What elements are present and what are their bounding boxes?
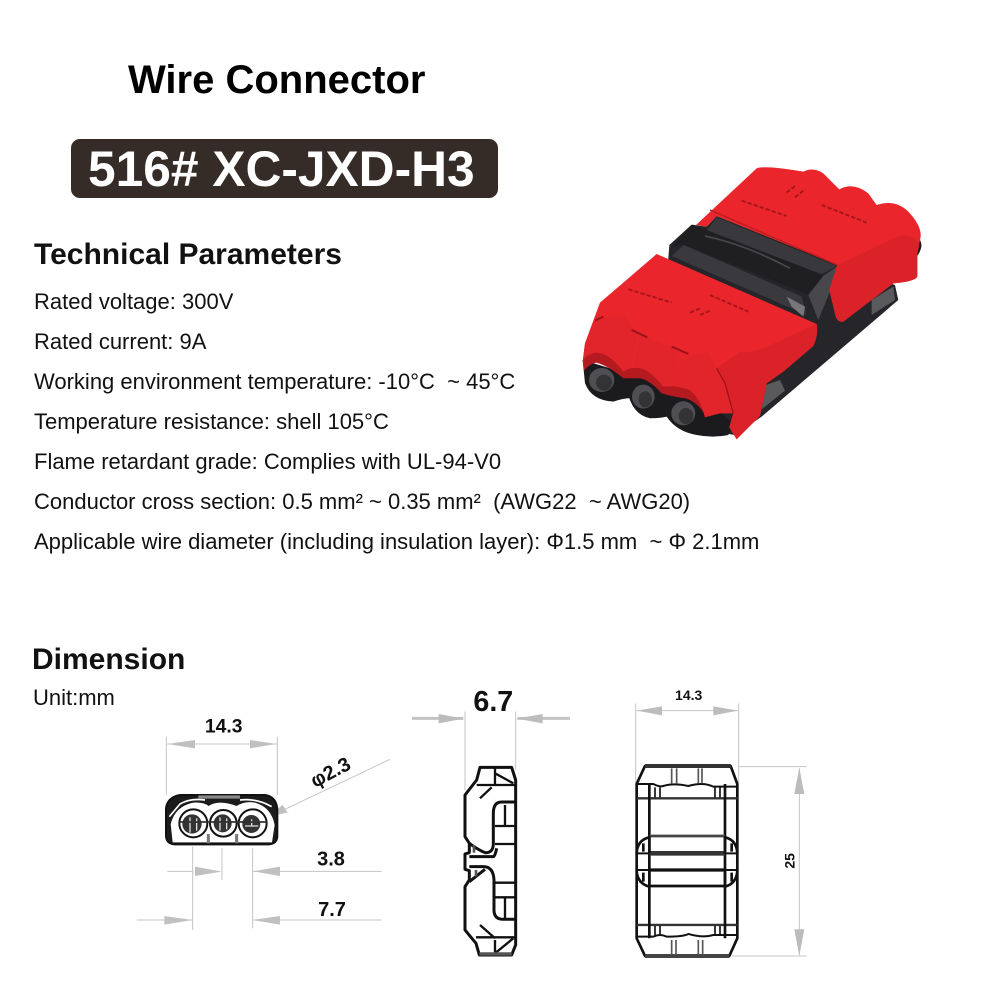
parameter list: Applicable wire diameter (including insulation layer): Φ1.5 mm ~ Φ 2.1mm bbox=[34, 529, 759, 554]
parameter list: Rated voltage: 300V bbox=[34, 289, 233, 314]
front sleeve inner rim bbox=[583, 343, 707, 418]
lobe shading bbox=[583, 315, 733, 417]
dimension lines bbox=[137, 737, 390, 930]
connector end outline bbox=[166, 795, 277, 844]
centre band grey faces bbox=[672, 245, 807, 315]
rear end dark edge bbox=[917, 237, 921, 256]
drawing: top view bbox=[636, 687, 807, 956]
heading: technical parameters: Technical Parameters bbox=[34, 238, 342, 271]
label 25: 25 bbox=[781, 853, 797, 869]
label 7.7: 7.7 bbox=[318, 899, 346, 921]
label 3.8: 3.8 bbox=[317, 849, 345, 871]
embossed marks, front bbox=[628, 289, 748, 315]
parameter list: Conductor cross section: 0.5 mm² ~ 0.35 mm² (AWG22 ~ AWG20) bbox=[34, 489, 690, 514]
label 14.3: 14.3 bbox=[675, 687, 702, 703]
wire sockets bbox=[589, 368, 695, 425]
drawing: front end view bbox=[137, 717, 390, 930]
socket blob bbox=[583, 360, 733, 437]
parameter list bbox=[34, 289, 759, 554]
parameter list: Flame retardant grade: Complies with UL-94-V0 bbox=[34, 449, 501, 474]
label 14.3: 14.3 bbox=[205, 717, 243, 738]
model badge: 516# XC-JXD-H3 bbox=[88, 141, 475, 197]
dimension lines bbox=[636, 703, 807, 956]
label 6.7: 6.7 bbox=[473, 686, 513, 718]
side windows bbox=[872, 287, 895, 315]
parameter list: Temperature resistance: shell 105°C bbox=[34, 409, 389, 434]
heading: dimension: Dimension bbox=[32, 643, 185, 676]
label phi 2.3: φ2.3 bbox=[307, 753, 354, 792]
side outline bbox=[465, 767, 516, 955]
front red sleeve bbox=[583, 254, 817, 439]
unit note: Unit:mm bbox=[33, 685, 115, 710]
top outline bbox=[637, 766, 737, 956]
product photo: connector bbox=[583, 167, 921, 439]
rear sleeve side shading bbox=[829, 235, 919, 322]
embossed marks, rear bbox=[742, 186, 867, 223]
dimension lines bbox=[412, 712, 570, 790]
parameter list: Rated current: 9A bbox=[34, 329, 206, 354]
parameter list: Working environment temperature: -10°C ~ 45°C bbox=[34, 369, 515, 394]
rear red sleeve bbox=[696, 167, 921, 322]
front sleeve side shading bbox=[717, 324, 817, 439]
arrowheads bbox=[637, 706, 804, 956]
drawing: side view bbox=[412, 686, 570, 955]
title: Wire Connector bbox=[128, 58, 425, 102]
black body bbox=[660, 216, 898, 435]
arrowheads bbox=[439, 714, 543, 723]
arrowheads bbox=[164, 740, 288, 925]
